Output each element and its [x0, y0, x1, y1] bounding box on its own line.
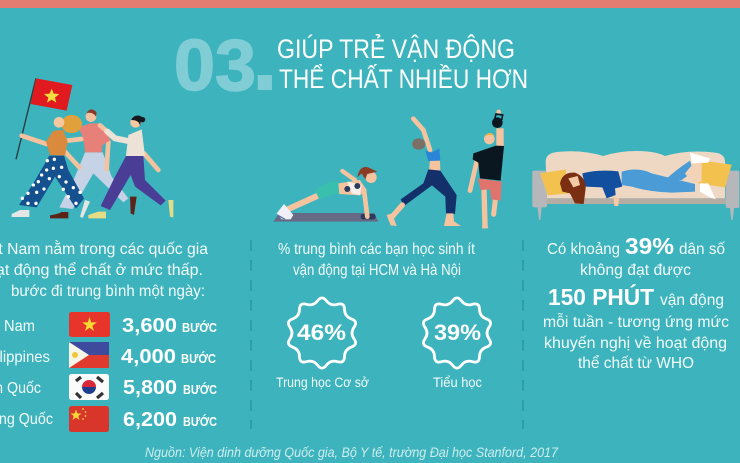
person sleeping — [560, 153, 716, 206]
step counts: 3,600 — [122, 315, 177, 337]
woman doing plank — [277, 167, 377, 219]
step counts: 4,000 — [121, 346, 176, 368]
dumbbell — [361, 214, 376, 219]
badge: 46% lower secondary: 46% — [297, 320, 346, 345]
illustration: people walking with flag — [12, 78, 173, 218]
source note: Nguồn: Viện dinh dưỡng Quốc gia, Bộ Y tế, trường Đại học Stanford, 2017 — [145, 444, 559, 460]
country names — [0, 318, 53, 428]
step counts — [121, 315, 218, 431]
step counts: BƯỚC — [182, 320, 218, 335]
step counts: BƯỚC — [183, 414, 218, 429]
step counts: BƯỚC — [181, 351, 217, 366]
badge: 39% primary: Tiểu học — [433, 374, 482, 390]
flag: Vietnam — [69, 312, 110, 337]
column 3 text: dân số — [679, 241, 725, 258]
column 1 intro text: bước đi trung bình một ngày: — [11, 283, 205, 300]
flag: China — [69, 406, 109, 432]
step counts: 5,800 — [123, 377, 177, 399]
step counts: BƯỚC — [183, 382, 218, 397]
column 3 text: khuyến nghị về hoạt động — [544, 335, 727, 352]
column 3 text — [543, 233, 729, 372]
column 3 text: thể chất từ WHO — [578, 354, 694, 372]
column 2 intro text: % trung bình các bạn học sinh ít — [278, 241, 475, 258]
illustration: exercising people — [273, 110, 504, 228]
flag — [16, 78, 72, 159]
flag: South Korea — [69, 374, 109, 400]
title: THỂ CHẤT NHIỀU HƠN — [279, 63, 528, 94]
section number: . — [251, 0, 279, 112]
column 2 intro text — [278, 241, 475, 279]
title: GIÚP TRẺ VẬN ĐỘNG — [277, 32, 515, 64]
illustration: person lying on sofa — [532, 151, 739, 220]
sofa — [532, 151, 739, 220]
section number — [174, 0, 279, 112]
badge: 39% primary: 39% — [434, 320, 481, 345]
column 2 intro text: vận động tại HCM và Hà Nội — [293, 262, 461, 279]
column 1 intro text — [0, 239, 208, 300]
badge: 39% primary — [423, 298, 491, 390]
badge: 46% lower secondary — [276, 298, 369, 390]
column 3 text: 150 PHÚT — [548, 283, 654, 310]
person 2 — [50, 109, 137, 218]
section number: 03 — [174, 26, 256, 106]
exercise mat — [273, 213, 378, 222]
woman in lunge pose — [387, 119, 461, 226]
column 3 text: mỗi tuần - tương ứng mức — [543, 312, 729, 331]
title — [277, 32, 528, 94]
badge: 46% lower secondary: Trung học Cơ sở — [276, 374, 369, 390]
top accent bar — [0, 0, 740, 8]
person 3 — [88, 116, 173, 218]
person 1 — [12, 115, 90, 218]
man lifting kettlebell — [470, 110, 504, 228]
column 3 text: vận động — [660, 292, 724, 309]
step counts: 6,200 — [123, 409, 177, 431]
flag: Philippines — [69, 342, 109, 368]
pillows — [540, 161, 732, 195]
column 3 text: Có khoảng — [547, 241, 620, 258]
column 3 text: 39% — [625, 233, 674, 259]
column 3 text: không đạt được — [580, 262, 691, 279]
